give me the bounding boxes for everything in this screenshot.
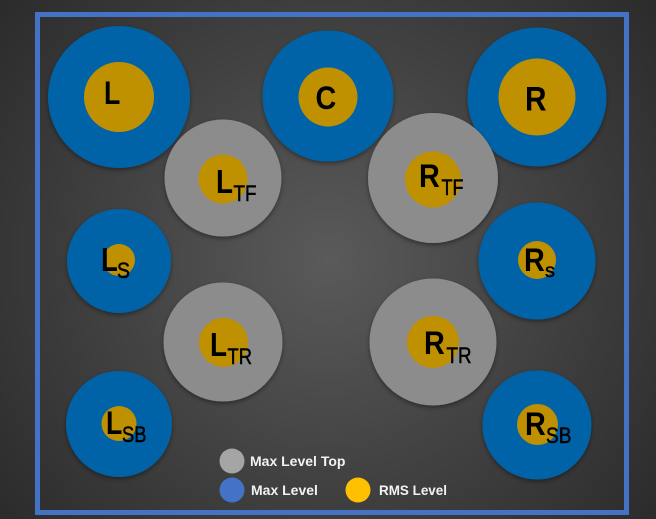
speaker L top front: L bbox=[216, 163, 233, 200]
legend: max level top bbox=[220, 448, 345, 474]
speaker L surround back: L bbox=[106, 405, 122, 441]
speaker C bbox=[262, 30, 394, 162]
speaker R: R bbox=[525, 80, 546, 118]
speaker L: L bbox=[104, 75, 120, 111]
speaker L top rear: TR bbox=[228, 344, 252, 369]
speaker R surround: s bbox=[545, 261, 555, 282]
speaker R top rear: TR bbox=[446, 343, 472, 368]
legend: max level top: Max Level Top bbox=[250, 453, 345, 469]
speaker R surround back: SB bbox=[546, 423, 572, 448]
speaker L top front: TF bbox=[234, 181, 256, 206]
speaker R surround back: R bbox=[525, 406, 546, 442]
legend: RMS level: RMS Level bbox=[379, 482, 447, 498]
legend: max level: Max Level bbox=[251, 482, 318, 498]
speaker L top front bbox=[164, 120, 282, 236]
speaker L surround: L bbox=[101, 241, 118, 278]
speaker C: C bbox=[316, 80, 336, 116]
speaker L surround back: SB bbox=[122, 422, 146, 447]
speaker R top front: TF bbox=[442, 175, 464, 200]
speaker L surround bbox=[67, 209, 171, 313]
speaker R top rear bbox=[370, 278, 496, 406]
speaker R bbox=[468, 28, 606, 166]
speaker L surround: S bbox=[117, 258, 130, 283]
speaker L top rear: L bbox=[210, 326, 227, 363]
speaker R top front bbox=[368, 113, 498, 243]
speaker R top rear: R bbox=[424, 325, 445, 361]
speaker L surround back bbox=[66, 371, 172, 477]
speaker L top rear bbox=[164, 282, 282, 402]
speaker R surround back bbox=[482, 370, 592, 480]
legend: max level bbox=[220, 478, 318, 502]
speaker L bbox=[48, 26, 190, 168]
speaker R surround bbox=[478, 202, 596, 320]
legend: RMS level bbox=[346, 478, 447, 502]
speaker R surround: R bbox=[524, 242, 545, 278]
legend bbox=[220, 448, 447, 502]
speaker R top front: R bbox=[419, 158, 440, 194]
